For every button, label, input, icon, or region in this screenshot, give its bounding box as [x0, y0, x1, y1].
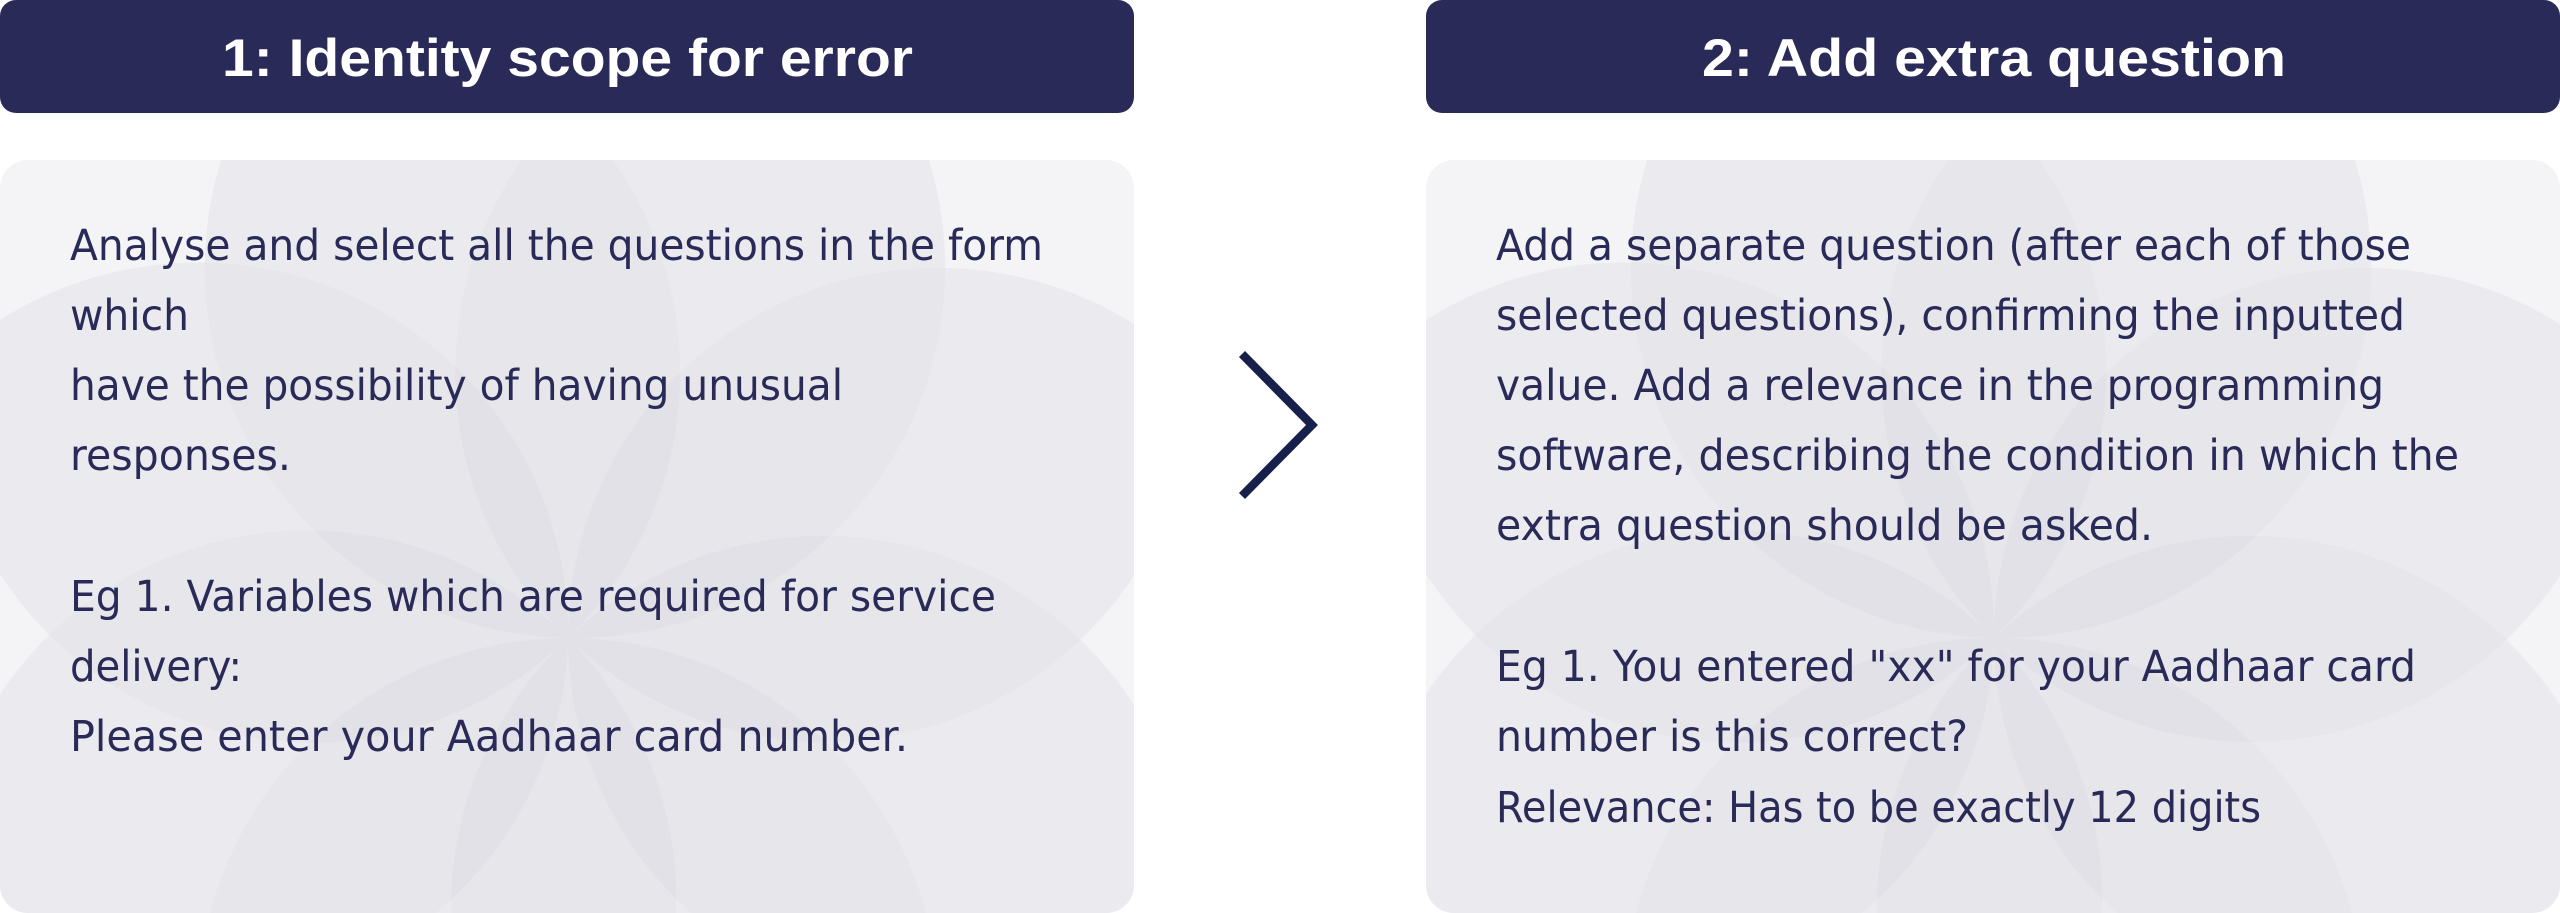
card: step 2 background with flower [1426, 160, 2560, 913]
text block: step 1 description: Please enter your Aadhaar card number. [70, 712, 908, 762]
text block: step 2 description: Relevance: Has to be exactly 12 digits [1496, 783, 2261, 833]
panel: step 1 [0, 0, 1134, 913]
text block: step 1 description: delivery: [70, 642, 242, 692]
panel: step 2 [1426, 0, 2560, 913]
text block: step 1 description: Analyse and select all the questions in the form [70, 221, 1043, 271]
text block: step 2 description: Add a separate question (after each of those [1496, 221, 2411, 271]
text block: step 1 description: have the possibility of having unusual [70, 361, 843, 411]
text block: step 2 description [1496, 221, 2459, 833]
card: step 1 background with flower [0, 160, 1134, 913]
heading bar: step 2 [1426, 0, 2560, 113]
text block: step 2 description: number is this correct? [1496, 712, 1968, 762]
text block: step 2 description: selected questions), confirming the inputted [1496, 291, 2405, 341]
text block: step 1 description: which [70, 291, 189, 341]
text block: step 1 description: Eg 1. Variables which are required for service [70, 572, 996, 622]
text block: step 1 description: responses. [70, 431, 291, 481]
arrow: chevron between steps [1242, 354, 1312, 496]
text block: step 1 description [70, 221, 1043, 762]
heading bar: step 1: 1: Identity scope for error [222, 29, 913, 88]
heading bar: step 1 [0, 0, 1134, 113]
text block: step 2 description: extra question should be asked. [1496, 501, 2153, 551]
text block: step 2 description: Eg 1. You entered "xx" for your Aadhaar card [1496, 642, 2416, 692]
text block: step 2 description: value. Add a relevance in the programming [1496, 361, 2384, 411]
heading bar: step 2: 2: Add extra question [1702, 29, 2286, 88]
text block: step 2 description: software, describing the condition in which the [1496, 431, 2459, 481]
